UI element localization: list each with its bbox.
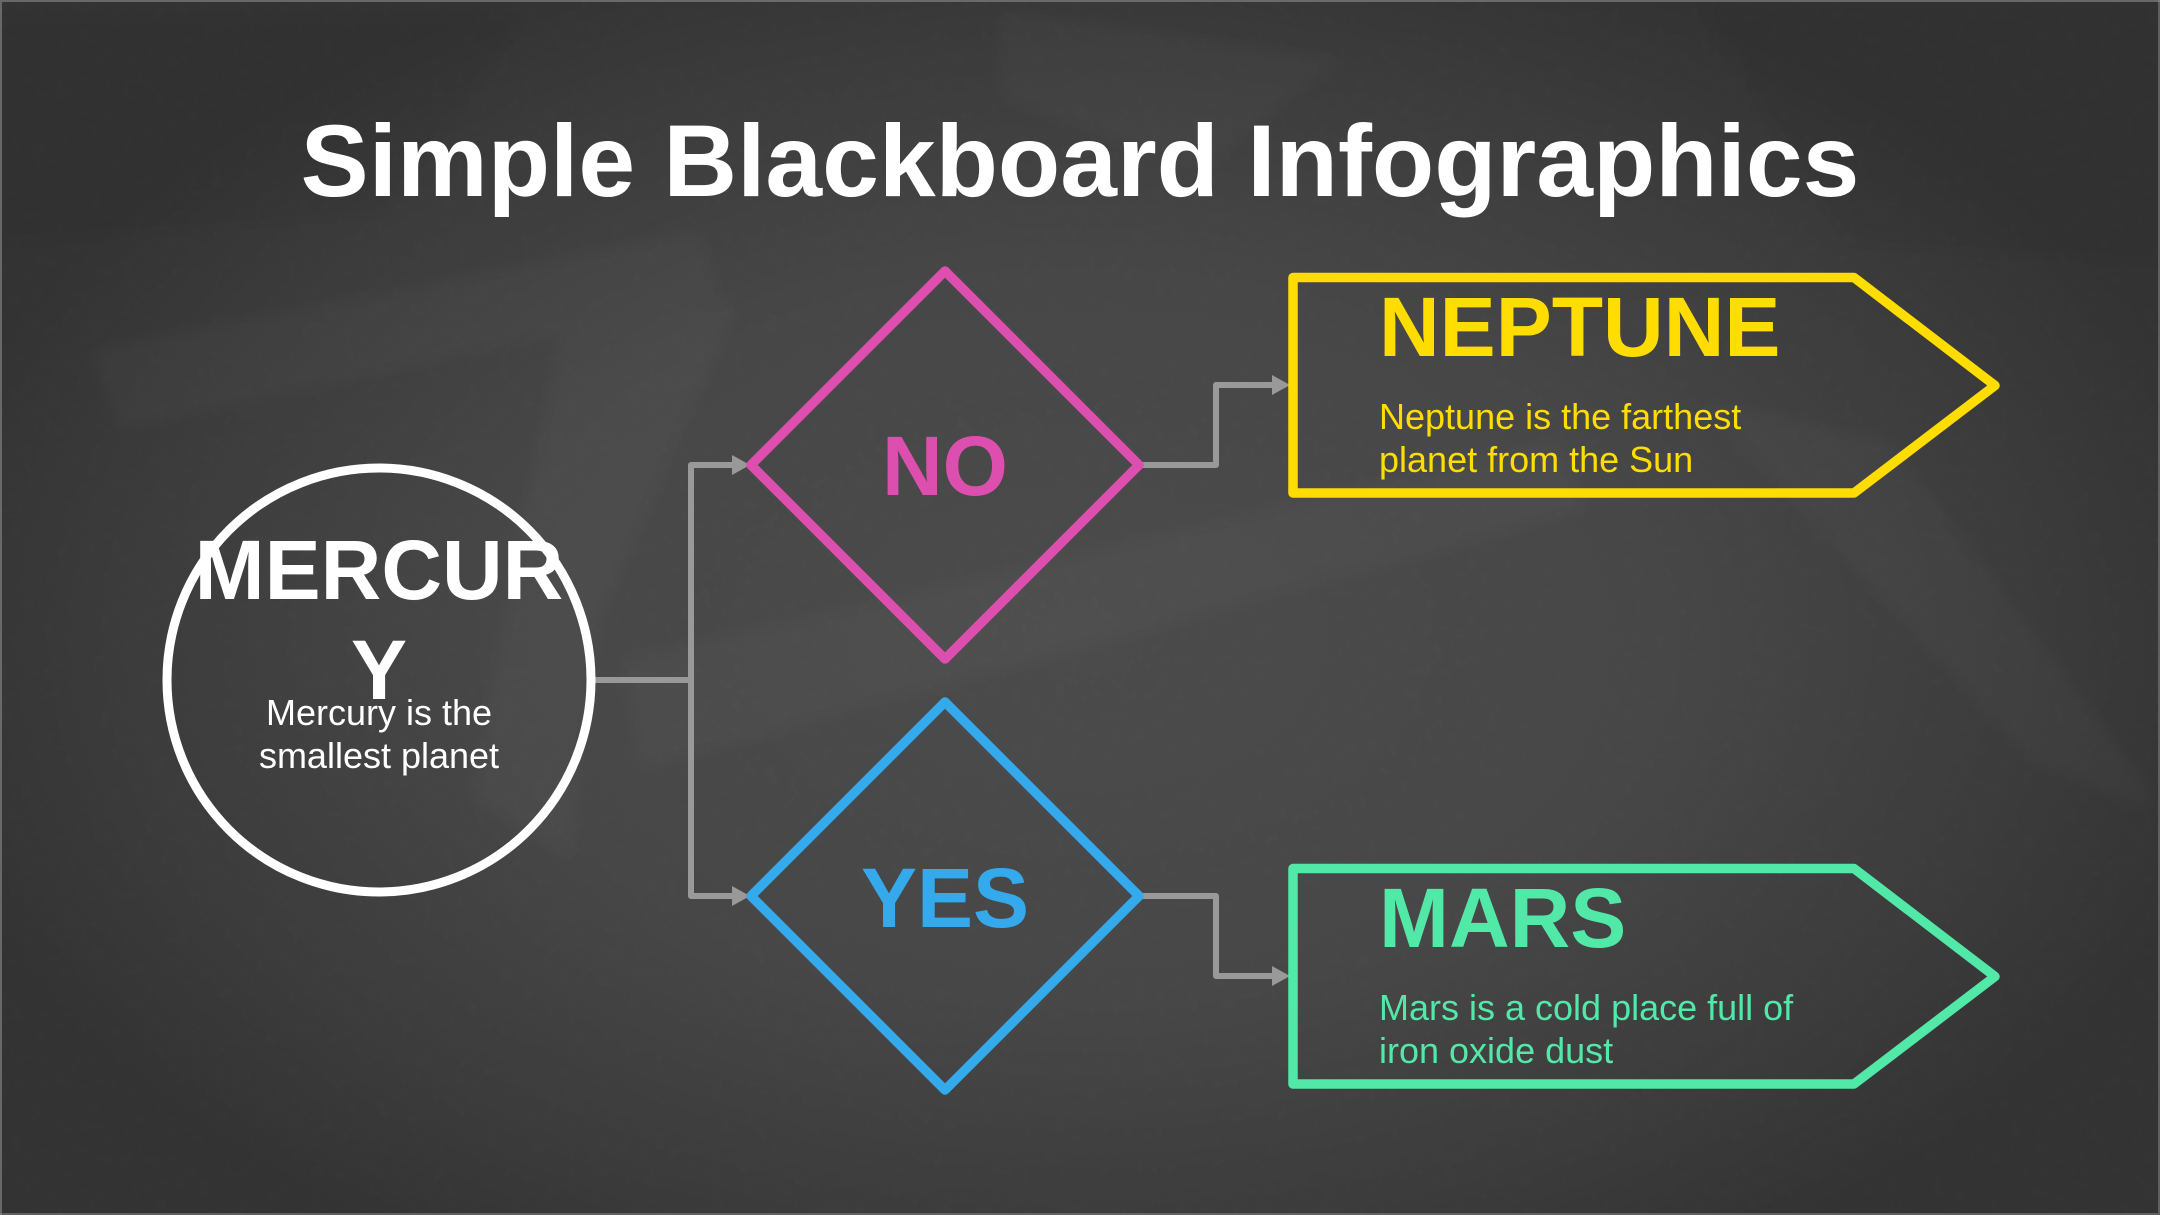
connector: Mercury to NO and YES: [595, 455, 750, 906]
Neptune description: planet from the Sun: [1379, 439, 1693, 480]
Neptune heading: NEPTUNE: [1379, 280, 1780, 374]
Mars heading: MARS: [1379, 871, 1626, 965]
outcome box: Mars: [1293, 868, 1995, 1084]
decision diamond: YES: [751, 702, 1139, 1090]
Mercury heading: MERCUR: [195, 523, 563, 617]
Neptune description: Neptune is the farthest: [1379, 396, 1741, 437]
Mars description: Mars is a cold place full of: [1379, 987, 1794, 1028]
Mars description: iron oxide dust: [1379, 1030, 1613, 1071]
connector: YES to Mars: [1143, 896, 1290, 986]
outcome box: Neptune: [1293, 278, 1995, 493]
decision diamond: NO: NO: [882, 419, 1008, 513]
connector: NO to Neptune: [1143, 375, 1290, 465]
Mercury description: Mercury is the: [266, 692, 492, 733]
Mercury heading: Y: [351, 623, 407, 717]
title: Simple Blackboard Infographics: [301, 104, 1859, 218]
Mercury description: smallest planet: [259, 735, 499, 776]
decision diamond: NO: [751, 271, 1139, 659]
decision diamond: YES: YES: [861, 851, 1029, 945]
circle node: Mercury: [167, 468, 591, 892]
